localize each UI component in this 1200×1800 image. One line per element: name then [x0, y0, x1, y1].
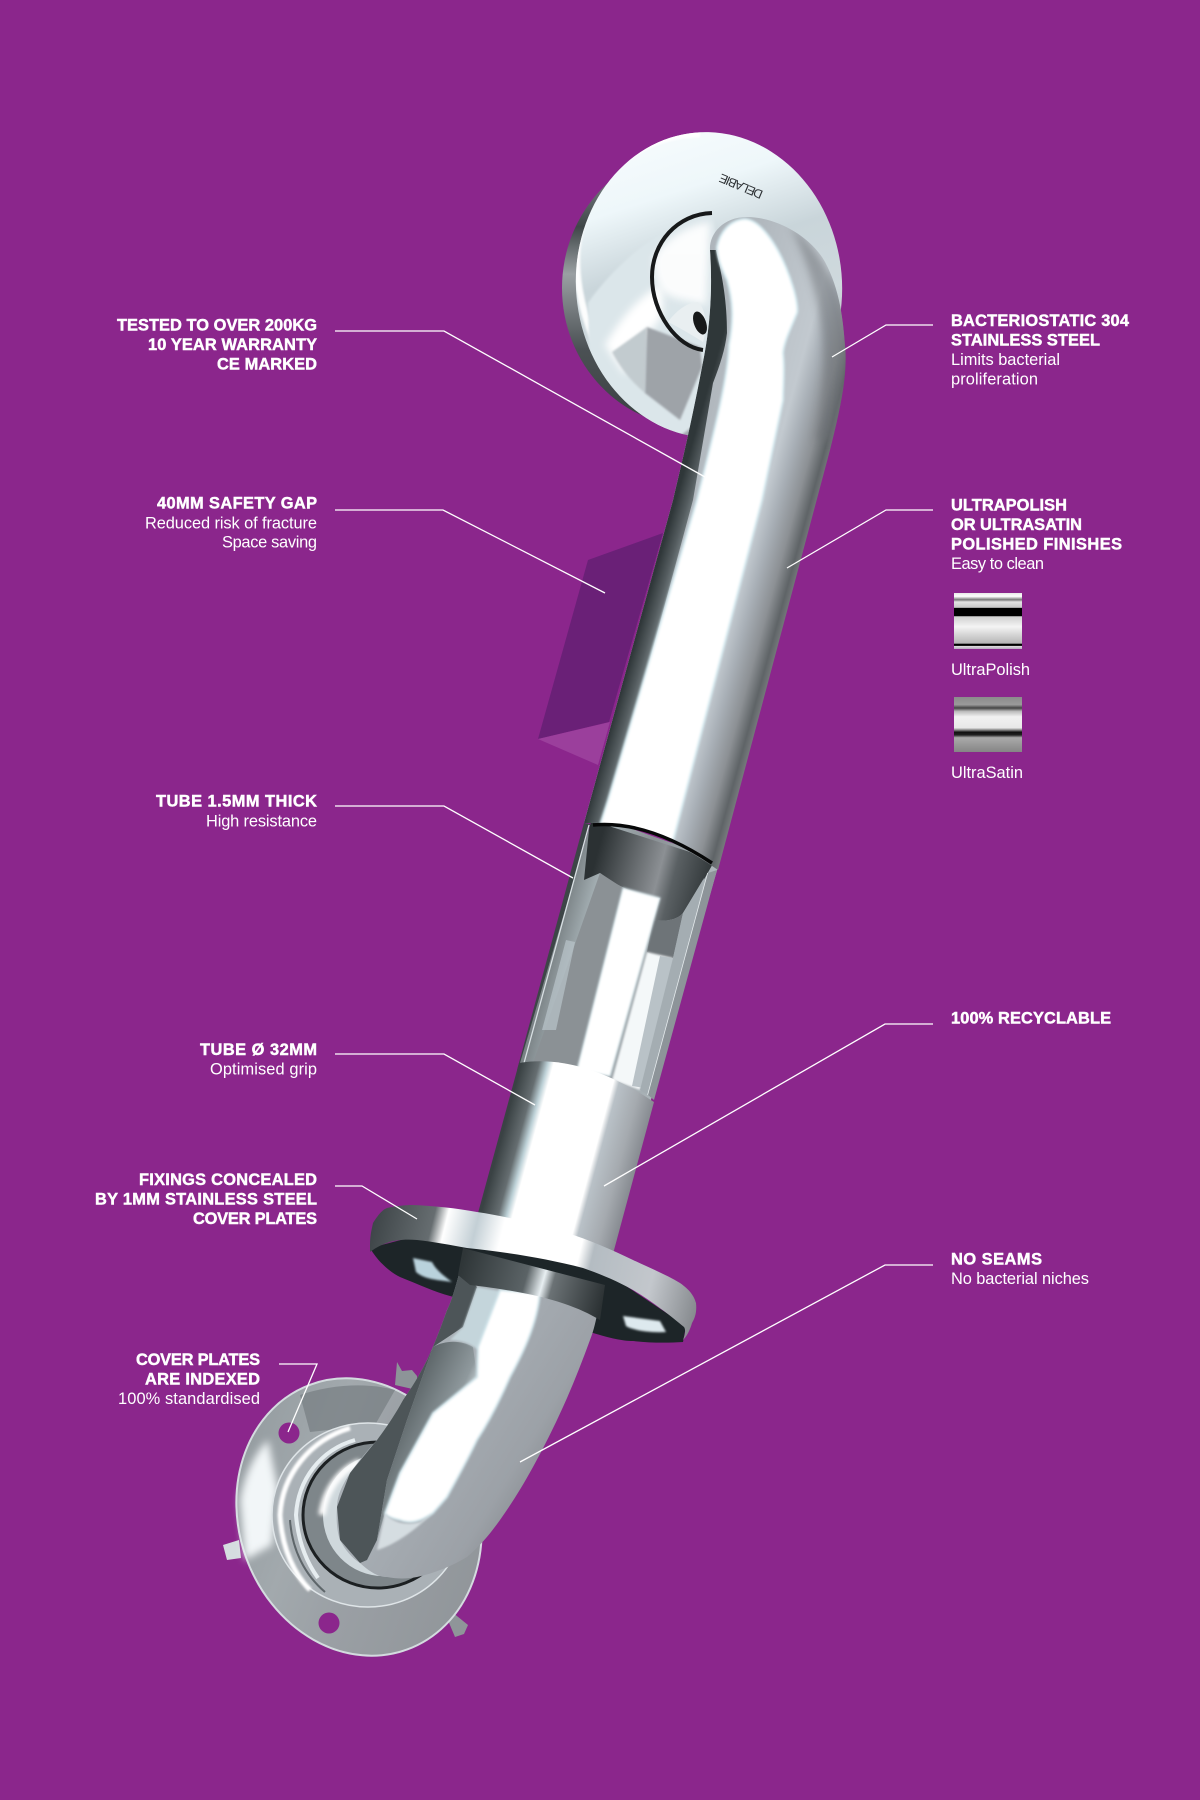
swatch: UltraSatin — [954, 697, 1022, 752]
leader line: recyclable — [604, 1024, 933, 1186]
label: stainless steel — [951, 312, 1130, 388]
label: safety gap: Reduced risk of fracture — [145, 514, 317, 532]
pale upper reflection — [450, 1286, 499, 1350]
screw holes — [278, 1422, 300, 1444]
label: safety gap: Space saving — [222, 534, 317, 552]
label: tested: TESTED TO OVER 200KG — [117, 316, 317, 334]
label: fixings: BY 1MM STAINLESS STEEL — [95, 1190, 317, 1208]
label: no seams: NO SEAMS — [951, 1250, 1042, 1268]
label: stainless steel: proliferation — [951, 370, 1038, 388]
label: recyclable: 100% RECYCLABLE — [951, 1010, 1111, 1028]
inner dark band — [337, 1270, 477, 1563]
label: UltraSatin: UltraSatin — [951, 764, 1023, 782]
leader line: no seams — [520, 1265, 933, 1462]
cover plate underside — [370, 1235, 686, 1343]
40mm gap shadow behind the bar — [538, 533, 663, 765]
mid reflection — [377, 1342, 477, 1540]
leader line: tube thickness — [335, 806, 573, 878]
label: indexed: 100% standardised — [118, 1390, 260, 1408]
label: fixings: COVER PLATES — [193, 1210, 317, 1228]
lower sheen — [377, 1513, 433, 1550]
leader line: indexed plates — [279, 1364, 317, 1432]
white highlight — [385, 1290, 540, 1522]
label: tube thickness — [156, 792, 317, 830]
inner tube — [532, 873, 623, 1070]
lower wall plate — [198, 1343, 520, 1691]
label: tube diameter: TUBE Ø 32MM — [200, 1041, 317, 1059]
screw recess — [668, 302, 705, 342]
label: tested — [117, 316, 317, 374]
label: safety gap: 40MM SAFETY GAP — [157, 494, 317, 512]
cover plate outer band — [370, 1205, 696, 1340]
label: indexed: COVER PLATES — [136, 1351, 260, 1369]
brand mark: DELABIE — [717, 171, 765, 201]
label: safety gap — [145, 494, 317, 552]
label: tube diameter: Optimised grip — [210, 1060, 317, 1078]
dark inner wall — [584, 820, 715, 921]
label: tube thickness: TUBE 1.5MM THICK — [156, 792, 317, 810]
label: tube diameter — [200, 1041, 317, 1078]
upper bent tube — [584, 217, 846, 870]
label: finishes: OR ULTRASATIN — [951, 516, 1082, 534]
label: finishes — [951, 496, 1122, 573]
lower sleeve of tube — [472, 1061, 654, 1265]
leader line: tube diameter — [335, 1054, 535, 1105]
label: finishes: ULTRAPOLISH — [951, 496, 1067, 514]
label: indexed: ARE INDEXED — [145, 1370, 260, 1388]
tube cut edge — [593, 824, 712, 863]
leader line: finishes — [787, 510, 933, 568]
left tube wall — [517, 823, 590, 1070]
label: UltraPolish: UltraPolish — [951, 661, 1030, 679]
dome reflection — [588, 234, 714, 434]
leader line: strength — [335, 331, 705, 477]
label: tested: CE MARKED — [217, 356, 317, 374]
label: stainless steel: Limits bacterial — [951, 351, 1060, 369]
swatch: UltraPolish — [954, 593, 1022, 649]
label: indexed — [118, 1351, 260, 1408]
label: no seams — [951, 1250, 1089, 1288]
label: tested: 10 YEAR WARRANTY — [148, 336, 317, 354]
dished centre rings — [272, 1423, 464, 1607]
elbow collar — [458, 1248, 605, 1320]
tabs — [395, 1362, 417, 1390]
black ring gasket — [652, 213, 712, 350]
leader line: fixings — [335, 1186, 417, 1219]
label: finishes: Easy to clean — [951, 555, 1044, 573]
label: stainless steel: BACTERIOSTATIC 304 — [951, 312, 1130, 330]
label: finishes: POLISHED FINISHES — [951, 536, 1122, 554]
label: no seams: No bacterial niches — [951, 1270, 1089, 1288]
label: stainless steel: STAINLESS STEEL — [951, 332, 1100, 350]
upper wall plate — [562, 132, 842, 436]
glass cut-away section — [517, 823, 718, 1100]
lower elbow — [336, 1276, 596, 1578]
label: fixings — [95, 1171, 317, 1228]
leader line: safety gap — [335, 510, 605, 593]
label: fixings: FIXINGS CONCEALED — [139, 1171, 317, 1189]
leader line: stainless steel — [832, 325, 933, 357]
label: tube thickness: High resistance — [206, 812, 317, 830]
